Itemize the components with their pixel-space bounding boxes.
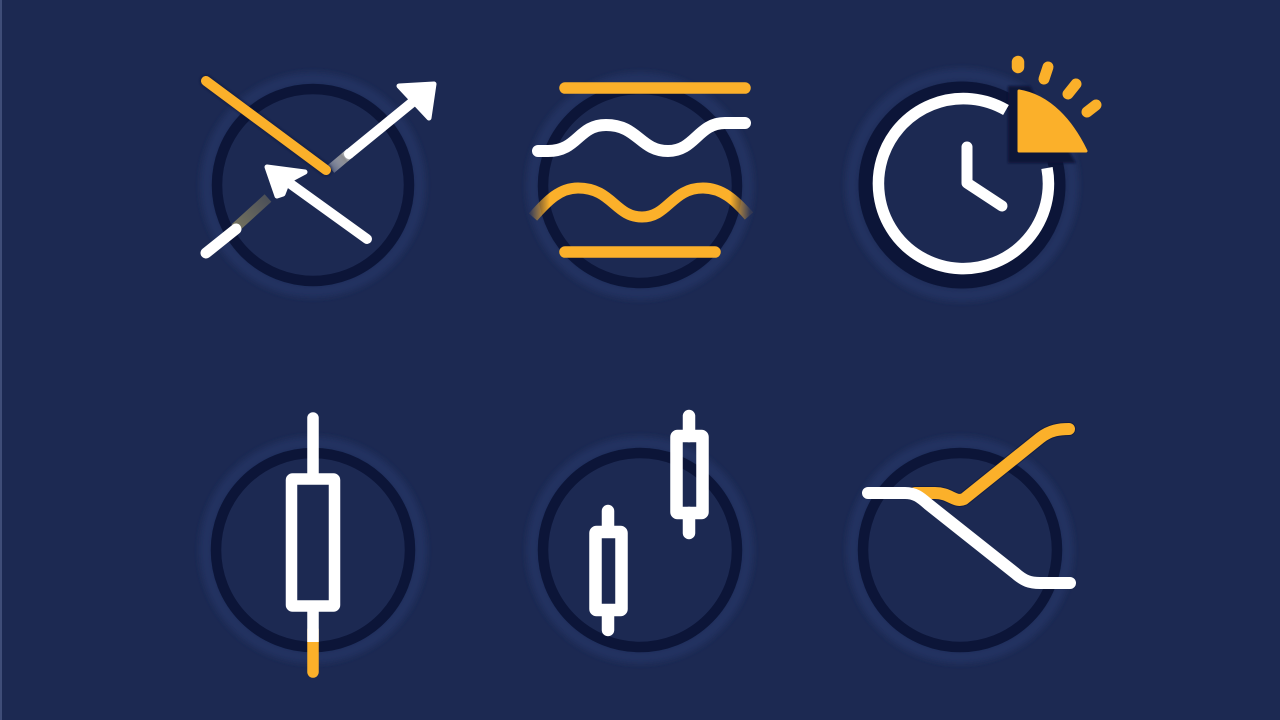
icon: wave channel bbox=[533, 79, 749, 293]
icon: crossing trend arrows bbox=[206, 79, 434, 291]
icon: two candlesticks bbox=[533, 416, 747, 657]
icon: clock with alert wedge bbox=[852, 62, 1096, 295]
icon: alert wedge bbox=[1019, 91, 1086, 151]
icon: diverging trend lines bbox=[853, 429, 1070, 657]
icon: single candlestick bbox=[206, 418, 420, 672]
upper candlestick bbox=[676, 416, 702, 533]
lower candlestick bbox=[596, 511, 622, 630]
icon: alert ticks bbox=[1018, 62, 1096, 112]
